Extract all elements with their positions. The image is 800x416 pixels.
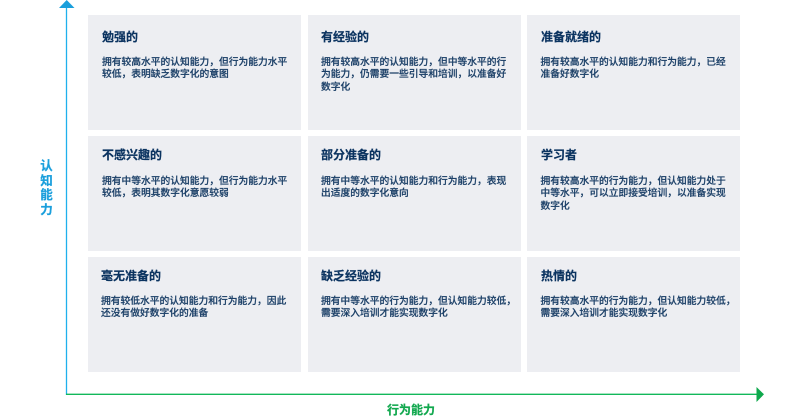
text: 勉强的 description [102, 56, 287, 80]
panel: 毫无准备的 [88, 257, 300, 372]
text: 有经验的 description: 为能力，仍需要一些引导和培训，以准备好 [321, 69, 506, 80]
text: 学习者 description [540, 175, 726, 212]
text: 有经验的 description: 拥有较高水平的认知能力，但中等水平的行 [321, 57, 506, 68]
text: 缺乏经验的 description: 拥有中等水平的行为能力，但认知能力较低， [321, 296, 516, 307]
text: 有经验的 description [321, 56, 506, 93]
heading: 部分准备的: 部分准备的 [321, 148, 381, 162]
heading: 毫无准备的: 毫无准备的 [101, 269, 161, 283]
text: 准备就绪的 description [540, 56, 726, 80]
text: 不感兴趣的 description: 拥有中等水平的认知能力，但行为能力水平 [102, 176, 287, 187]
y axis label: 力 [40, 203, 53, 217]
text: 热情的 description: 需要深入培训才能实现数字化 [540, 308, 667, 319]
text: 学习者 description: 拥有较高水平的行为能力，但认知能力处于 [540, 176, 726, 187]
y axis label: 认 [40, 159, 53, 173]
panel: 学习者 [527, 136, 740, 250]
text: 勉强的 description: 较低，表明缺乏数字化的意图 [102, 69, 229, 80]
text: 毫无准备的 description: 拥有较低水平的认知能力和行为能力，因此 [101, 296, 286, 307]
text: 部分准备的 description [321, 176, 506, 199]
heading: 勉强的: 勉强的 [102, 30, 138, 44]
text: 热情的 description: 拥有较高水平的行为能力，但认知能力较低， [540, 296, 736, 307]
text: 毫无准备的 description [101, 295, 286, 319]
text: 准备就绪的 description: 拥有较高水平的认知能力和行为能力，已经 [540, 57, 726, 68]
text: 勉强的 description: 拥有较高水平的认知能力，但行为能力水平 [102, 57, 287, 68]
panel: 缺乏经验的 [308, 257, 520, 372]
text: 学习者 description: 数字化 [540, 201, 570, 212]
heading: 缺乏经验的: 缺乏经验的 [321, 269, 381, 283]
heading: 热情的: 热情的 [541, 269, 577, 283]
text: 不感兴趣的 description: 较低，表明其数字化意愿较弱 [102, 188, 229, 199]
panel: 准备就绪的 [527, 15, 740, 130]
text: 学习者 description: 中等水平，可以立即接受培训，以准备实现 [540, 188, 726, 199]
panel: 不感兴趣的 [88, 136, 300, 250]
heading: 有经验的: 有经验的 [321, 30, 369, 44]
text: 缺乏经验的 description [321, 295, 516, 319]
heading: 不感兴趣的: 不感兴趣的 [102, 148, 162, 162]
text: 有经验的 description: 数字化 [321, 82, 350, 93]
text: 部分准备的 description: 拥有中等水平的认知能力和行为能力，表现 [321, 176, 506, 187]
heading: 学习者: 学习者 [541, 148, 577, 162]
text: 准备就绪的 description: 准备好数字化 [540, 69, 599, 80]
panel: 有经验的 [308, 15, 520, 130]
text: 热情的 description [540, 295, 736, 319]
text: 缺乏经验的 description: 需要深入培训才能实现数字化 [321, 308, 448, 319]
text: 不感兴趣的 description [102, 176, 287, 199]
panel: 热情的 [527, 257, 740, 372]
text: 毫无准备的 description: 还没有做好数字化的准备 [101, 308, 208, 319]
text: 部分准备的 description: 出适度的数字化意向 [321, 188, 409, 199]
y axis label [40, 159, 53, 217]
panel: 勉强的 [88, 15, 300, 130]
heading: 准备就绪的: 准备就绪的 [541, 30, 601, 44]
y axis label: 能 [40, 188, 53, 202]
y axis label: 知 [40, 174, 53, 188]
panel: 部分准备的 [308, 136, 520, 250]
